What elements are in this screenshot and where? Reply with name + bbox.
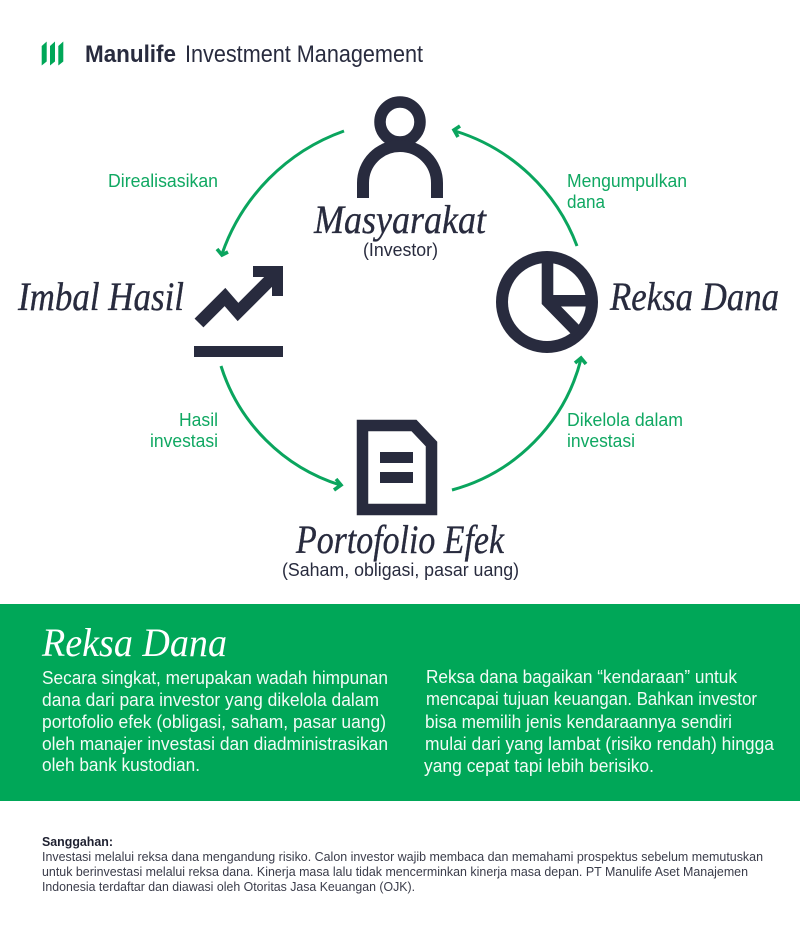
text block: disclaimer: Sanggahan: xyxy=(42,834,113,849)
heading: Portofolio Efek: Portofolio Efek xyxy=(295,517,505,562)
arrow: Reksa Dana to Masyarakat xyxy=(454,126,577,246)
heading: Reksa Dana: Reksa Dana xyxy=(609,274,779,319)
arrow: Imbal Hasil to Portofolio Efek xyxy=(221,366,341,490)
panel: Reksa Dana definition xyxy=(0,604,800,801)
label: Hasil investasi xyxy=(150,410,218,451)
label: Dikelola dalam investasi: Dikelola dalam xyxy=(567,410,683,430)
panel heading: Reksa Dana xyxy=(41,620,227,665)
label: Mengumpulkan dana: dana xyxy=(567,192,606,212)
text block: left paragraph: oleh bank kustodian. xyxy=(42,755,200,775)
label: Dikelola dalam investasi xyxy=(567,410,683,451)
icon: document xyxy=(362,426,432,510)
text block: right paragraph: mencapai tujuan keuangan. Bahkan investor xyxy=(426,689,757,709)
logo: Manulife Investment Management xyxy=(42,41,423,68)
label: Direalisasikan: Direalisasikan xyxy=(108,171,218,191)
text block: left paragraph: oleh manajer investasi dan diadministrasikan xyxy=(42,734,388,754)
text block: left paragraph: dana dari para investor yang dikelola dalam xyxy=(42,690,379,710)
heading: Masyarakat: Masyarakat xyxy=(313,197,487,242)
label: Hasil investasi: investasi xyxy=(150,431,218,451)
text block: left paragraph: Secara singkat, merupakan wadah himpunan xyxy=(42,668,388,688)
label: Mengumpulkan dana: Mengumpulkan xyxy=(567,171,687,191)
label: Mengumpulkan dana xyxy=(567,171,687,212)
text block: right paragraph: bisa memilih jenis kendaraannya sendiri xyxy=(425,712,732,732)
text block: left paragraph xyxy=(42,668,388,775)
text block: disclaimer: untuk berinvestasi melalui reksa dana. Kinerja masa lalu tidak mencerminkan kinerja masa depan. PT Manulife Aset Manajemen xyxy=(42,865,748,879)
text block: right paragraph xyxy=(424,667,775,776)
icon: pie chart xyxy=(502,255,595,347)
text block: right paragraph: yang cepat tapi lebih berisiko. xyxy=(424,756,654,776)
heading: Imbal Hasil: Imbal Hasil xyxy=(17,274,184,319)
icon: person xyxy=(363,102,437,198)
arrow: Masyarakat to Imbal Hasil xyxy=(217,131,344,255)
icon: Manulife stripes xyxy=(42,42,63,66)
text block: disclaimer xyxy=(42,834,763,894)
brand descriptor: Investment Management xyxy=(185,41,423,68)
brand name: Manulife xyxy=(85,41,176,68)
icon: growth chart xyxy=(194,266,283,357)
arrow: Portofolio Efek to Reksa Dana xyxy=(452,358,586,490)
label: Hasil investasi: Hasil xyxy=(179,410,218,430)
text block: disclaimer: Indonesia terdaftar dan diawasi oleh Otoritas Jasa Keuangan (OJK). xyxy=(42,880,415,894)
text block: left paragraph: portofolio efek (obligasi, saham, pasar uang) xyxy=(42,712,386,732)
label: Dikelola dalam investasi: investasi xyxy=(567,431,635,451)
subheading: Saham, obligasi, pasar uang: (Saham, obligasi, pasar uang) xyxy=(282,560,519,580)
text block: disclaimer: Investasi melalui reksa dana mengandung risiko. Calon investor wajib membaca dan memahami prospektus sebelum memutuskan xyxy=(42,850,763,864)
text block: right paragraph: mulai dari yang lambat (risiko rendah) hingga xyxy=(425,734,775,754)
subheading: Investor: (Investor) xyxy=(363,240,438,260)
text block: right paragraph: Reksa dana bagaikan “kendaraan” untuk xyxy=(426,667,738,687)
